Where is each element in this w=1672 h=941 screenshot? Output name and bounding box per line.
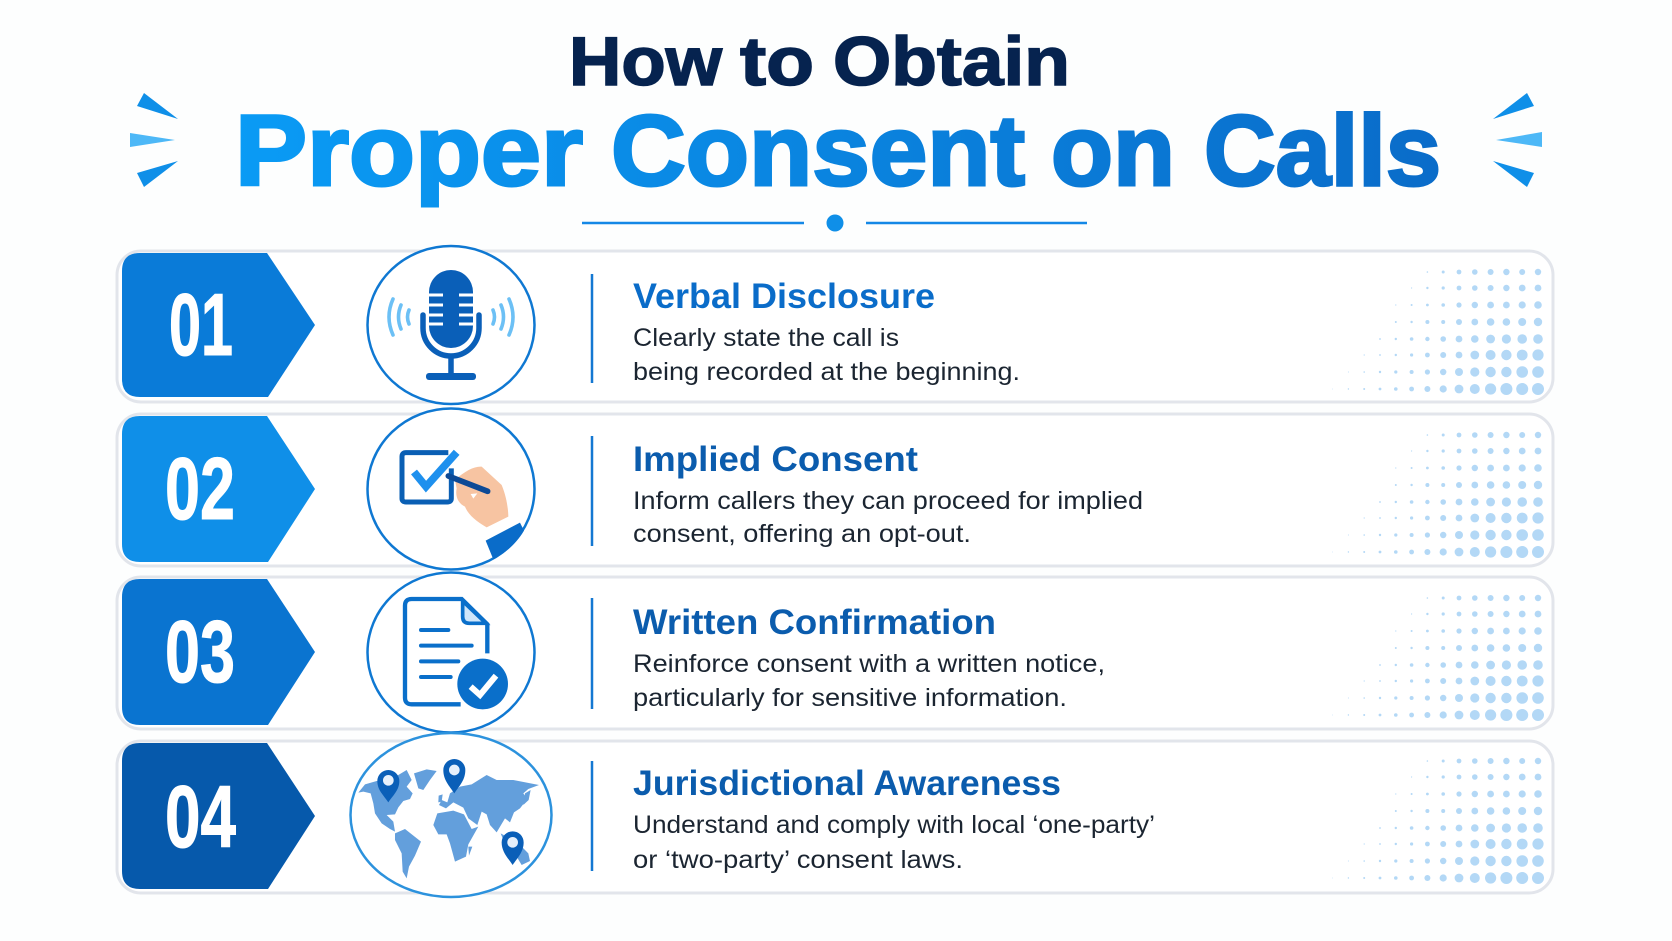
divider (591, 274, 593, 383)
panel: 03 Written Confirmation (117, 577, 1553, 729)
number 01: 01 (169, 275, 233, 374)
icon: world map with pins in circle (350, 733, 552, 897)
description: or ‘two-party’ consent laws. (633, 846, 963, 874)
icon: left burst (130, 93, 178, 187)
title divider with dot (582, 214, 1087, 232)
title: How to Obtain: to (740, 23, 814, 100)
description: particularly for sensitive information. (633, 684, 1067, 712)
panel: 04 Jurisdictional Awareness (117, 741, 1553, 893)
divider (591, 761, 593, 871)
dot pattern (1332, 595, 1544, 721)
number 04: 04 (165, 767, 236, 866)
description (633, 324, 1020, 386)
heading: Written Confirmation (633, 603, 996, 642)
icon: hand ticking checkbox in circle (368, 408, 534, 570)
panel: 02 Implied Consent (117, 414, 1553, 566)
number badge 03 (122, 579, 315, 725)
divider (591, 436, 593, 546)
description: Clearly state the call is (633, 324, 899, 352)
description: consent, offering an opt-out. (633, 520, 971, 548)
description (633, 487, 1143, 548)
title: Proper Consent on Calls: Calls (1204, 95, 1441, 207)
title: How to Obtain: How (569, 23, 722, 100)
dot pattern (1332, 269, 1544, 395)
description (633, 650, 1105, 712)
heading: Verbal Disclosure (633, 277, 935, 316)
dot pattern (1332, 432, 1544, 558)
title: Proper Consent on Calls: Proper (235, 95, 583, 207)
icon: document with check in circle (368, 572, 534, 732)
description: being recorded at the beginning. (633, 358, 1020, 386)
number badge 02 (122, 416, 315, 562)
number badge 04 (122, 743, 315, 889)
heading: Jurisdictional Awareness (633, 764, 1061, 803)
icon: microphone in circle (368, 246, 534, 404)
title: How to Obtain (569, 23, 1070, 100)
description: Understand and comply with local ‘one-party’ (633, 811, 1155, 839)
title: Proper Consent on Calls (235, 95, 1441, 207)
number 03: 03 (165, 602, 235, 701)
title: Proper Consent on Calls: Consent (611, 95, 1025, 207)
divider (591, 598, 593, 709)
number 02: 02 (165, 439, 235, 538)
title: How to Obtain: Obtain (833, 23, 1070, 100)
title: Proper Consent on Calls: on (1051, 95, 1175, 207)
description (633, 811, 1155, 874)
number badge 01 (122, 253, 315, 397)
description: Reinforce consent with a written notice, (633, 650, 1105, 678)
description: Inform callers they can proceed for implied (633, 487, 1143, 515)
dot pattern (1332, 758, 1544, 884)
icon: right burst (1493, 93, 1542, 187)
heading: Implied Consent (633, 440, 918, 479)
panel: 01 Verbal Disclosure (117, 251, 1553, 402)
